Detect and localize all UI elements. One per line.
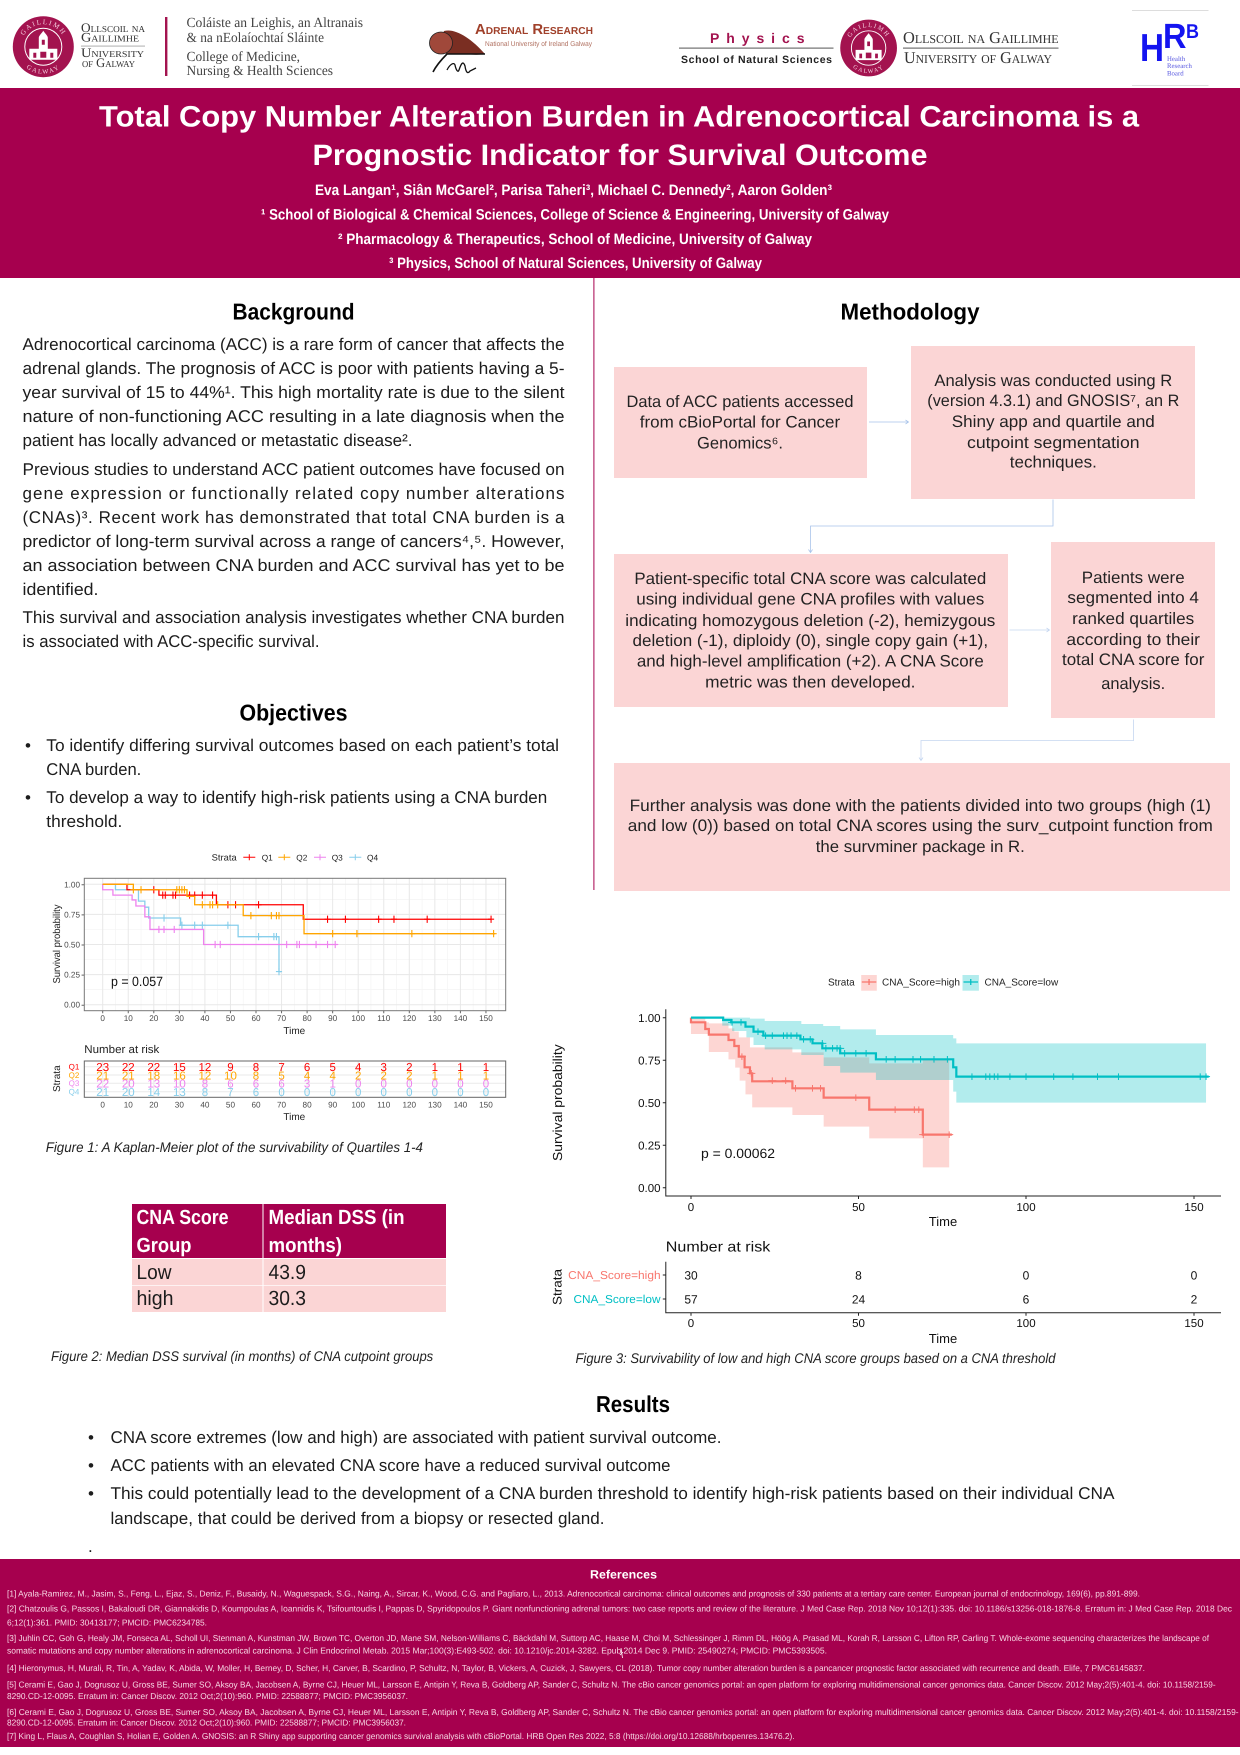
logo: Physics, School of Natural Sciences, University of Galway: Ollscoil na Gaillimhe [903, 28, 1058, 47]
table: number at risk: 3 [381, 1062, 387, 1074]
table: number at risk: 2 [1191, 1292, 1198, 1306]
step: analysis tools [911, 346, 1195, 499]
text: results list: • [88, 1484, 94, 1503]
text: objectives list: • [25, 788, 31, 807]
table: number at risk: 30 [684, 1268, 698, 1282]
step: CNA score [614, 554, 1008, 707]
icon: university crest [12, 16, 74, 78]
axis: survival y axis: 0.50 [64, 940, 80, 949]
axis: time x axis: 130 [428, 1014, 442, 1023]
table: number at risk: 0 [355, 1087, 361, 1099]
axis: time x axis: 30 [175, 1014, 184, 1023]
table: number at risk: 0 [457, 1079, 464, 1091]
table: number at risk: 5 [278, 1070, 285, 1082]
text: reference list: [4] Hieronymus, H, Murali, R, Tin, A, Yadav, K, Abida, W, Moller, H, Berney, D, Scher, H, Carver, B, Scardino, P, Schultz, N, Taylor, B, Vickers, A, Cuzick, J, Sawyers, CL (2018). Tumor copy number alteration burden is a pancancer prognostic factor associated with recurrence and death. Elife, 7 PMC6145837. [7, 1663, 1145, 1673]
table: number at risk: 0 [355, 1079, 361, 1091]
table: median DSS survival by CNA score group: months) [268, 1234, 342, 1257]
step: analysis tools: techniques. [1010, 452, 1097, 472]
table: number at risk: 70 [277, 1100, 287, 1109]
axis: time x axis: 50 [226, 1014, 235, 1023]
text: results list: landscape, that could be derived from a biopsy or resected gland. [110, 1509, 604, 1528]
table: number at risk: Strata [550, 1269, 564, 1305]
step: quartiles [1051, 542, 1215, 718]
icon: university crest: GALWAY [27, 65, 58, 74]
table: number at risk: 0 [483, 1079, 489, 1091]
step: CNA score: Patient-specific total CNA score was calculated [634, 569, 986, 588]
table: number at risk: 1 [432, 1062, 438, 1074]
table: number at risk: 10 [173, 1079, 186, 1091]
table: median DSS survival by CNA score group: Median DSS (in [268, 1206, 404, 1229]
heading: references: References [590, 1568, 657, 1582]
table: number at risk: 6 [304, 1062, 310, 1074]
table: number at risk: 8 [202, 1087, 208, 1099]
table: number at risk: Number at risk [666, 1240, 771, 1256]
icon: university crest: GALWAY [854, 65, 882, 74]
table: number at risk: 0 [1191, 1268, 1198, 1282]
table: number at risk: 16 [173, 1070, 186, 1082]
text: background paragraphs: Previous studies to understand ACC patient outcomes have focused on [22, 460, 564, 479]
text: background paragraphs: year survival of 15 to 44%¹. This high mortality rate is due to the silent [22, 383, 565, 402]
plot panel: survival curves [84, 878, 506, 1011]
axis: time x axis: 10 [124, 1014, 133, 1023]
axis: time x axis: 20 [149, 1014, 159, 1023]
text: results list: ACC patients with an elevated CNA score have a reduced survival outcome [110, 1456, 670, 1475]
table: number at risk [550, 1240, 1221, 1346]
axes: survival probability and time: 50 [852, 1202, 865, 1214]
text: reference list: [1] Ayala-Ramirez, M., Jasim, S., Feng, L., Ejaz, S., Deniz, F., Busaidy, N., Waguespack, S.G., Naing, A., Sircar, K., Wood, C.G. and Pagliaro, L., 2013. Adrenocortical carcinoma: clinical outcomes and prognosis of 330 patients at a tertiary care center. European journal of endocrinology, 169(6), pp.891-899. [7, 1588, 1140, 1598]
table: number at risk: 12 [199, 1070, 211, 1082]
table: number at risk: CNA_Score=high [568, 1270, 661, 1282]
annotation: p value: p = 0.057 [111, 974, 163, 989]
table: number at risk: 40 [200, 1100, 210, 1109]
table: median DSS survival by CNA score group: 30.3 [268, 1287, 306, 1310]
table: number at risk: 0 [432, 1079, 438, 1091]
table: number at risk: 0 [278, 1087, 285, 1099]
axes: survival probability and time: 1.00 [638, 1013, 660, 1025]
step: cutpoint analysis: Further analysis was done with the patients divided into two groups (high (1) [630, 796, 1211, 815]
axis: time x axis: 140 [454, 1014, 468, 1023]
table: number at risk: 0 [329, 1087, 336, 1099]
logo: Health Research Board: B [1186, 21, 1199, 43]
axes: survival probability and time: 0.75 [638, 1056, 660, 1068]
logo: Health Research Board: Health [1167, 56, 1186, 63]
table: number at risk: 15 [173, 1062, 186, 1074]
table: number at risk: 80 [303, 1100, 312, 1109]
table: number at risk: 2 [355, 1070, 361, 1082]
table: number at risk: 6 [227, 1079, 234, 1091]
table: number at risk: 22 [147, 1062, 160, 1074]
table: number at risk: 1 [457, 1062, 464, 1074]
table: number at risk: 0 [381, 1087, 387, 1099]
text: background paragraphs: predictor of long-term survival across a range of cancers⁴,⁵. However, [22, 532, 564, 551]
table: number at risk: 0 [1023, 1268, 1030, 1282]
logo: Adrenal Research: National University of Ireland Galway [485, 40, 592, 48]
table: number at risk: 13 [173, 1087, 186, 1099]
table: number at risk: 23 [96, 1062, 109, 1074]
text: background paragraphs: Adrenocortical carcinoma (ACC) is a rare form of cancer that affects the [22, 335, 565, 354]
logo: Health Research Board: H [1140, 27, 1164, 70]
axis: time x axis: 80 [303, 1014, 312, 1023]
table: number at risk: 12 [199, 1062, 211, 1074]
icon: university crest: GAILLIMH [848, 22, 890, 37]
logo: Health Research Board: R [1163, 17, 1186, 56]
table: number at risk: 150 [479, 1100, 493, 1109]
step: quartiles: analysis. [1101, 674, 1165, 693]
legend: CNA score groups: CNA_Score=low [984, 978, 1059, 989]
table: number at risk: 0 [100, 1100, 105, 1109]
table: median DSS survival by CNA score group: 43.9 [268, 1261, 306, 1284]
table: number at risk: 6 [278, 1079, 285, 1091]
axes: survival probability and time: 0.50 [638, 1098, 660, 1110]
table: number at risk: 4 [329, 1070, 336, 1082]
axis: time x axis: 90 [328, 1014, 338, 1023]
axis: time x axis: 100 [351, 1014, 365, 1023]
caption: figure 1: Figure 1: A Kaplan-Meier plot of the survivability of Quartiles 1-4 [46, 1139, 423, 1155]
table: number at risk: 2 [406, 1070, 413, 1082]
table: number at risk: 100 [1016, 1318, 1036, 1330]
authors: Eva Langan¹, Siân McGarel², Parisa Taheri³, Michael C. Dennedy², Aaron Golden³ [315, 182, 832, 199]
text: reference list [7, 1588, 1239, 1741]
axes: survival probability and time [550, 1009, 1221, 1229]
table: number at risk: Q2 [69, 1071, 80, 1080]
axes: survival probability and time: 0 [688, 1202, 694, 1214]
panel: objectives [25, 700, 559, 831]
table: median DSS survival by CNA score group: high [136, 1287, 174, 1310]
step: analysis tools: Analysis was conducted using R [934, 371, 1172, 390]
table: number at risk: 0 [432, 1087, 438, 1099]
panel: results [88, 1391, 1115, 1556]
table: number at risk: 18 [147, 1070, 160, 1082]
table: number at risk: 130 [428, 1100, 442, 1109]
text: results list [88, 1428, 1115, 1556]
axis: survival y axis: 1.00 [64, 880, 80, 889]
step: analysis tools: cutpoint segmentation [967, 433, 1140, 452]
step: data access: Data of ACC patients accessed [626, 392, 854, 411]
text: reference list: 8290.CD-12-0095. Erratum in: Cancer Discov. 2012 Oct;2(10):960. PMID: 22588877; PMCID: PMC3956037. [7, 1718, 406, 1728]
table: number at risk: 30 [175, 1100, 184, 1109]
title: Prognostic Indicator for Survival Outcome [312, 139, 928, 172]
axis: time x axis: 120 [402, 1014, 417, 1023]
text: objectives list: To develop a way to identify high-risk patients using a CNA burden [46, 788, 547, 807]
table: number at risk: 10 [124, 1100, 133, 1109]
table: number at risk: 140 [454, 1100, 468, 1109]
table: number at risk: 0 [406, 1079, 413, 1091]
table: number at risk: 0 [457, 1087, 464, 1099]
step: quartiles: ranked quartiles [1072, 609, 1194, 628]
logo: Health Research Board: Board [1167, 70, 1184, 78]
heading: objectives: Objectives [240, 700, 348, 726]
table: number at risk: 8 [253, 1062, 259, 1074]
college name [186, 16, 363, 79]
heading: methodology: Methodology [840, 298, 980, 324]
table: number at risk: 20 [149, 1100, 159, 1109]
step: CNA score: using individual gene CNA profiles with values [636, 590, 984, 608]
text: background paragraphs: nature of non-functioning ACC resulting in a late diagnosis when the [22, 407, 564, 426]
text: reference list: 6;12(1):361. PMID: 30413177; PMCID: PMC6234785. [7, 1618, 207, 1628]
table: number at risk: 57 [684, 1292, 698, 1306]
table: median DSS survival by CNA score group [132, 1204, 446, 1312]
axis: time x axis: 0 [100, 1014, 105, 1023]
text: objectives list: To identify differing survival outcomes based on each patient’s total [46, 736, 559, 755]
college name: Coláiste an Leighis, an Altranais [186, 16, 363, 31]
table: number at risk: 7 [227, 1087, 234, 1099]
college name: Nursing & Health Sciences [186, 64, 333, 79]
table: number at risk: 150 [1184, 1318, 1204, 1330]
axis: time x axis [100, 1012, 493, 1037]
legend: strata Q1-Q4: Q4 [367, 852, 378, 862]
axis: time x axis: 150 [479, 1014, 493, 1023]
step: cutpoint analysis: and low (0)) based on total CNA scores using the surv_cutpoint function from [628, 816, 1213, 835]
text: reference list: [7] King L, Flaus A, Coughlan S, Holian E, Golden A. GNOSIS: an R Shiny app supporting cancer genomics survival analysis with cBioPortal. HRB Open Res 2022, 5:8 (https://doi.org/10.12688/hrbopenres.13476.2). [7, 1731, 795, 1741]
text: background paragraphs [22, 335, 565, 651]
table: number at risk: 0 [688, 1318, 694, 1330]
text: results list: • [88, 1456, 94, 1475]
table: number at risk: CNA_Score=low [574, 1294, 661, 1306]
table: number at risk: 50 [852, 1318, 865, 1330]
axis: time x axis: 110 [377, 1014, 391, 1023]
table: number at risk: Time [283, 1112, 306, 1123]
table: number at risk: 0 [406, 1087, 413, 1099]
logo: Physics, School of Natural Sciences, University of Galway [679, 20, 1058, 76]
table: number at risk: 20 [122, 1087, 135, 1099]
step: quartiles: Patients were [1082, 568, 1185, 587]
table: number at risk: 100 [351, 1100, 365, 1109]
text: reference list: 8290.CD-12-0095. Erratum in: Cancer Discov. 2012 Oct;2(10):960. PMID: 22588877; PMCID: PMC3956037. [7, 1691, 408, 1701]
table: number at risk: 60 [251, 1100, 261, 1109]
table: number at risk: 6 [1023, 1292, 1030, 1306]
legend: CNA score groups: Strata [828, 978, 855, 989]
table: number at risk: 5 [329, 1062, 336, 1074]
step: quartiles: according to their [1066, 630, 1200, 649]
table: number at risk: 21 [96, 1070, 109, 1082]
axes: survival probability and time: Time [929, 1214, 957, 1229]
step: quartiles: total CNA score for [1062, 650, 1205, 669]
text: background paragraphs: is associated with ACC-specific survival. [22, 632, 320, 651]
table: number at risk: 9 [227, 1062, 234, 1074]
logo: Health Research Board: Research [1167, 63, 1193, 70]
table: number at risk: 6 [253, 1079, 259, 1091]
heading: background: Background [232, 298, 354, 324]
university name: of Galway [82, 55, 135, 70]
table: number at risk: Strata [52, 1065, 63, 1092]
axis: time x axis: 60 [251, 1014, 261, 1023]
axes: survival probability and time: 100 [1016, 1202, 1036, 1214]
table: number at risk: 2 [381, 1070, 387, 1082]
text: background paragraphs: patient has locally advanced or metastatic disease². [22, 431, 412, 450]
table: median DSS survival by CNA score group: Group [136, 1234, 192, 1257]
table: number at risk: 3 [304, 1079, 310, 1091]
text: objectives list [25, 736, 559, 831]
step: cutpoint analysis: the survminer package in R. [816, 837, 1025, 856]
table: number at risk: 1 [329, 1079, 336, 1091]
axis: time x axis: 70 [277, 1014, 287, 1023]
panel: references [0, 1559, 1240, 1747]
axis: survival y axis: 0.75 [64, 910, 80, 919]
table: number at risk: 1 [483, 1062, 489, 1074]
table: number at risk: 14 [147, 1087, 161, 1099]
axes: survival probability and time: Survival probability [550, 1044, 565, 1161]
icon: university crest [840, 20, 897, 76]
text: objectives list: threshold. [46, 812, 122, 831]
caption: figure 2: Figure 2: Median DSS survival (in months) of CNA cutpoint groups [51, 1348, 433, 1364]
text: reference list: somatic mutations and copy number alterations in adrenocortical carcinoma. J Clin Endocrinol Metab. 2015 Mar;100(3):E493-502. doi: 10.1210/jc.2014-3282. Epub 2014 Dec 9. PMID: 25490274; PMCID: PMC5393505. [7, 1646, 827, 1656]
step: CNA score: deletion (-1), diploidy (0), single copy gain (+1), [632, 631, 988, 650]
affiliations: ¹ School of Biological & Chemical Sciences, College of Science & Engineering, University of Galway [261, 206, 890, 224]
legend: CNA score groups: CNA_Score=high [882, 978, 960, 989]
text: reference list: [5] Cerami E, Gao J, Dogrusoz U, Gross BE, Sumer SO, Aksoy BA, Jacobsen A, Byrne CJ, Heuer ML, Larsson E, Antipin Y, Reva B, Goldberg AP, Sander C, Schultz N. The cBio cancer genomics portal: an open platform for exploring multidimensional cancer genomics data. Cancer Discov. 2012 May;2(5):401-4. doi: 10.1158/2159- [7, 1680, 1216, 1690]
step: data access: from cBioPortal for Cancer [640, 412, 841, 432]
table: number at risk: 110 [377, 1100, 391, 1109]
icon: adrenal gland [430, 30, 485, 73]
axis: time x axis: 40 [200, 1014, 210, 1023]
text: reference list: [2] Chatzoulis G, Passos I, Bakaloudi DR, Giannakidis D, Koumpoulas A, Ioannidis K, Tsifountoudis I, Pappas D, Spyridopoulos P. Giant nonfunctioning adrenal tumors: two case reports and review of the literature. J Med Case Rep. 2018 Nov 10;12(1):335. doi: 10.1186/s13256-018-1876-8. Erratum in: J Med Case Rep. 2018 Dec [7, 1604, 1233, 1614]
annotation: p value: p = 0.00062 [701, 1146, 775, 1161]
step: CNA score: metric was then developed. [705, 672, 916, 692]
legend: strata Q1-Q4: Q3 [332, 852, 343, 862]
step: data access: Genomics⁶. [697, 434, 783, 452]
text: background paragraphs: This survival and association analysis investigates whether CNA burden [22, 608, 564, 627]
table: number at risk: 8 [202, 1079, 208, 1091]
step: cutpoint analysis [614, 763, 1230, 891]
legend: strata Q1-Q4: Q1 [262, 852, 273, 862]
text: background paragraphs: identified. [22, 580, 98, 599]
text: results list: This could potentially lead to the development of a CNA burden threshold to identify high-risk patients based on their individual CNA [110, 1484, 1115, 1503]
table: number at risk: 4 [304, 1070, 311, 1082]
logo: Physics, School of Natural Sciences, University of Galway: University of Galway [904, 48, 1052, 67]
table: number at risk: Q1 [69, 1062, 80, 1072]
table: number at risk: Time [929, 1331, 957, 1346]
legend: strata Q1-Q4: Strata [212, 853, 237, 863]
text: objectives list: • [25, 736, 31, 755]
text: background paragraphs: (CNAs)³. Recent work has demonstrated that total CNA burden is a [22, 508, 565, 527]
table: number at risk: Q4 [69, 1088, 80, 1096]
logo: University of Galway with College of Medicine [12, 16, 363, 79]
table: number at risk: 2 [406, 1062, 413, 1074]
arrow: step 4 to step 5 [919, 720, 1134, 760]
title [99, 100, 1140, 172]
text: results list: • [88, 1428, 94, 1447]
text: results list: CNA score extremes (low and high) are associated with patient survival outcome. [110, 1428, 722, 1447]
chart: figure 1 Kaplan-Meier plot of quartiles [52, 852, 506, 1123]
college name: College of Medicine, [186, 50, 300, 65]
table: number at risk: 120 [402, 1100, 417, 1109]
table: number at risk: 8 [253, 1070, 259, 1082]
panel: methodology flowchart [614, 298, 1230, 891]
text: background paragraphs: adrenal glands. The prognosis of ACC is poor with patients having a 5- [22, 359, 564, 378]
text: background paragraphs: an association between CNA burden and ACC survival has yet to be [22, 556, 564, 575]
table: number at risk [52, 1044, 506, 1123]
table: number at risk: 24 [852, 1292, 865, 1306]
chart: figure 3 Kaplan-Meier plot of CNA score groups [550, 975, 1221, 1346]
title banner [0, 88, 1240, 278]
step: analysis tools: Shiny app and quartile and [952, 412, 1155, 431]
table: number at risk: 22 [96, 1079, 109, 1091]
caption: figure 3: Figure 3: Survivability of low and high CNA score groups based on a CNA threshold [576, 1350, 1057, 1366]
text: background paragraphs: gene expression or functionally related copy number alterations [22, 484, 565, 503]
step: CNA score: and high-level amplification (+2). A CNA Score [637, 652, 984, 670]
table: number at risk: 1 [483, 1070, 489, 1082]
affiliations: ² Pharmacology & Therapeutics, School of Medicine, University of Galway [338, 231, 813, 248]
table: number at risk: 20 [122, 1079, 135, 1091]
table: number at risk: 0 [381, 1079, 387, 1091]
axes: survival probability and time: 150 [1184, 1202, 1204, 1214]
axis: survival y axis: Survival probability [52, 904, 63, 984]
affiliations: ³ Physics, School of Natural Sciences, University of Galway [389, 255, 763, 272]
table: number at risk: 0 [483, 1087, 489, 1099]
university name [81, 20, 146, 70]
table: number at risk: 22 [122, 1062, 135, 1074]
text: reference list: [3] Juhlin CC, Goh G, Healy JM, Fonseca AL, Scholl UI, Stenman A, Kunstman JW, Brown TC, Overton JD, Mane SM, Nelson-Williams C, Bäckdahl M, Suttorp AC, Haase M, Choi M, Schlessinger J, Rimm DL, Höög A, Prasad ML, Korah R, Larsson C, Lifton RP, Carling T. Whole-exome sequencing characterizes the landscape of [7, 1633, 1210, 1643]
plot: survival curves with confidence bands [691, 1018, 1210, 1167]
table: number at risk: 6 [253, 1087, 259, 1099]
table: number at risk: 10 [224, 1070, 237, 1082]
text: reference list: [6] Cerami E, Gao J, Dogrusoz U, Gross BE, Sumer SO, Aksoy BA, Jacobsen A, Byrne CJ, Heuer ML, Larsson E, Antipin Y, Reva B, Goldberg AP, Sander C, Schultz N. The cBio cancer genomics portal: an open platform for exploring multidimensional cancer genomics data. Cancer Discov. 2012 May;2(5):401-4. doi: 10.1158/2159- [7, 1707, 1239, 1717]
table: number at risk: Number at risk [84, 1044, 160, 1056]
text: results list: . [88, 1537, 93, 1556]
logo: Physics, School of Natural Sciences, University of Galway: Physics [710, 30, 805, 46]
arrow: step 2 to step 3 [808, 500, 1053, 552]
table: number at risk: 8 [855, 1268, 862, 1282]
university name: Ollscoil na [81, 20, 146, 35]
table: number at risk: 21 [96, 1087, 109, 1099]
table: number at risk: 1 [432, 1070, 438, 1082]
table: number at risk: 13 [147, 1079, 160, 1091]
logo: Health Research Board [1132, 10, 1208, 86]
panel: background [22, 298, 565, 651]
table: number at risk: 7 [278, 1062, 285, 1074]
legend: strata Q1-Q4 [212, 852, 378, 863]
axes: survival probability and time: 0.25 [638, 1140, 660, 1152]
arrow: step 1 to step 2 [869, 420, 908, 424]
table: number at risk: 90 [328, 1100, 338, 1109]
axis: survival y axis [52, 880, 83, 1010]
affiliations [261, 206, 890, 272]
axis: time x axis: Time [283, 1026, 306, 1037]
table: number at risk: 1 [457, 1070, 464, 1082]
heading: results: Results [596, 1391, 670, 1417]
university name: Gaillimhe [81, 30, 140, 44]
axis: survival y axis: 0.00 [64, 1001, 80, 1010]
table: number at risk: 50 [226, 1100, 235, 1109]
step: analysis tools: (version 4.3.1) and GNOSIS⁷, an R [927, 391, 1179, 410]
logo: Adrenal Research [430, 22, 593, 73]
logo: Adrenal Research: Adrenal Research [475, 22, 593, 38]
arrow: step 3 to step 4 [1010, 628, 1050, 632]
table: number at risk: 4 [355, 1062, 362, 1074]
step: CNA score: indicating homozygous deletion (-2), hemizygous [625, 611, 995, 630]
college name: & na nEolaíochtaí Sláinte [186, 31, 324, 46]
table: number at risk: Q3 [69, 1079, 80, 1088]
legend: strata Q1-Q4: Q2 [296, 852, 308, 862]
axis: survival y axis: 0.25 [64, 970, 80, 979]
university name: University [81, 45, 145, 60]
icon: university crest: GAILLIMH [20, 20, 66, 35]
title: Total Copy Number Alteration Burden in Adrenocortical Carcinoma is a [99, 100, 1140, 134]
table: median DSS survival by CNA score group: CNA Score [136, 1206, 228, 1229]
step: quartiles: segmented into 4 [1067, 588, 1199, 607]
table: number at risk: 0 [304, 1087, 310, 1099]
axes: survival probability and time: 0.00 [638, 1183, 660, 1195]
table: median DSS survival by CNA score group: Low [136, 1261, 172, 1284]
step: data access [614, 367, 867, 478]
text: objectives list: CNA burden. [46, 760, 141, 779]
logo: Physics, School of Natural Sciences, University of Galway: School of Natural Sciences [681, 54, 832, 66]
legend: CNA score groups [828, 975, 1059, 991]
table: number at risk: 21 [122, 1070, 135, 1082]
